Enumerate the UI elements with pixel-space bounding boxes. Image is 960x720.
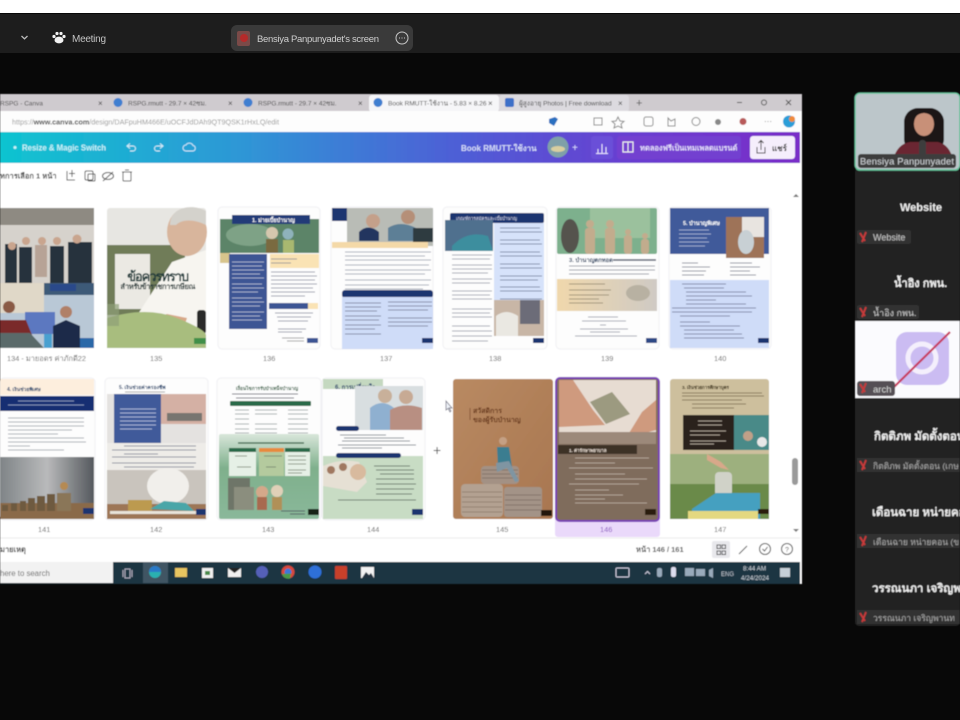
screen share pill: Bensiya Panpunyadet's screen [257, 34, 379, 45]
canva gradient toolbar: Resize & Magic Switch [22, 144, 106, 152]
windows taskbar: ENG [721, 572, 734, 578]
browser tab strip: RSPG.rmutt - 29.7 × 42ซม. [258, 100, 337, 108]
thumbnail 146 selected: 146 [600, 525, 612, 534]
tile: duanchai: เดือนฉาย หน่ายคอน (ข [873, 537, 959, 547]
thumbnail 138 [443, 207, 547, 363]
thumbnail 145: ของผู้รับบำนาญ [473, 415, 521, 425]
thumbnail 137 [331, 207, 433, 363]
thumbnail 142: 5. เงินช่วยค่าครองชีพ [119, 384, 166, 391]
windows taskbar: here to search [0, 569, 50, 578]
thumbnail 136 [218, 207, 320, 363]
windows taskbar [0, 562, 800, 584]
active speaker tile [855, 93, 960, 170]
chevron icon [22, 36, 28, 39]
canva gradient toolbar: + [572, 143, 578, 154]
thumbnail 140 [669, 207, 771, 363]
windows taskbar: 4/24/2024 [741, 575, 770, 582]
thumbnail 142 [105, 378, 208, 534]
screen share pill [231, 25, 413, 51]
status footer: หน้า 146 / 161 [636, 545, 684, 554]
address bar [0, 111, 802, 132]
tile: arch: arch [873, 384, 891, 396]
thumbnail 146 selected: 1. ค่ารักษาพยาบาล [569, 448, 607, 453]
browser window [0, 94, 802, 584]
thumbnail 140: 140 [714, 354, 726, 363]
tile: duanchai [857, 506, 960, 548]
tile: wannapa: วรรณนภา เจริญพานท [873, 613, 955, 623]
meeting top bar [0, 14, 960, 53]
thumbnail title: ข้อควรทราบ [127, 269, 189, 284]
thumbnail 135: 135 [150, 354, 162, 363]
cursor [446, 401, 452, 412]
thumbnail 137: 137 [380, 354, 392, 363]
thumbnail grid [0, 207, 771, 537]
thumbnail 141: 4. เงินช่วยพิเศษ [7, 386, 41, 393]
thumbnail 139: 3. บำนาญตกทอด [569, 256, 613, 264]
thumbnail 136: 1. ม่ายเบี้ยบำนาญ [252, 215, 295, 224]
thumbnail 143: 143 [262, 525, 274, 534]
canva gradient toolbar: Book RMUTT-ใช้งาน [461, 143, 537, 153]
address bar: ··· [764, 117, 772, 126]
thumbnail 139: 139 [601, 354, 613, 363]
thumbnail 138: เกณฑ์การสมัครและเบี้ยบำนาญ [456, 215, 517, 221]
meeting label: Meeting [72, 34, 106, 45]
thumbnail 141 [0, 378, 95, 534]
thumbnail 135: สำหรับข้าราชการเกษียณ [120, 282, 195, 291]
thumbnail 143: เงื่อนไขการรับบำเหน็จบำนาญ [236, 384, 298, 392]
status footer: ? [785, 547, 789, 554]
canva gradient toolbar: ทดลองฟรีเป็นเทมเพลตแบรนด์ [640, 142, 738, 152]
thumbnail 143 [217, 378, 321, 534]
tile: website [857, 202, 942, 244]
windows taskbar: 8:44 AM [743, 566, 766, 572]
thumbnail 144 [322, 378, 425, 534]
thumbnail 138: 138 [489, 354, 501, 363]
browser tab strip: × [228, 99, 233, 108]
status footer [0, 538, 800, 558]
tile: website: Website [873, 232, 905, 242]
page actions toolbar [0, 163, 800, 190]
thumbnail 145: 145 [496, 525, 508, 534]
add page plus icon: + [433, 442, 441, 458]
browser tab strip: RSPG.rmutt - 29.7 × 42ซม. [128, 100, 207, 108]
thumbnail 135 [107, 207, 207, 363]
thumbnail 142: 142 [150, 525, 162, 534]
tile: arch [855, 321, 960, 398]
browser tab strip: RSPG - Canva [0, 100, 43, 108]
thumbnail 134 [0, 208, 94, 363]
browser tab strip: ผู้สูงอายุ Photos | Free download [519, 100, 612, 108]
tile: nam-ing: น้ำอิง กพน. [894, 275, 947, 290]
tile: nam-ing [857, 275, 947, 319]
page actions toolbar: ทการเลือก 1 หน้า [0, 172, 57, 180]
participant panel [855, 93, 960, 626]
content scrollbar [792, 194, 799, 532]
thumbnail 134: 134 - มายอดร ค่าภักดี22 [7, 354, 86, 363]
top white strip [0, 0, 960, 13]
status footer: มายเหตุ [0, 545, 26, 554]
canva gradient toolbar [0, 132, 800, 163]
thumbnail 147: 147 [714, 525, 726, 534]
thumbnail 144: 6. การเปลี่ยนใจ [335, 382, 376, 391]
panel: dark tile background [855, 168, 960, 626]
thumbnail 139 [556, 207, 659, 363]
browser tab strip: + [636, 98, 642, 110]
address bar: https://www.canva.com/design/DAFpuHM466E/uOCFJdDAh9QT9QSK1rHxLQ/edit [12, 118, 279, 126]
browser tab strip: × [98, 99, 103, 108]
thumbnail 144: 144 [367, 525, 379, 534]
thumbnail 146 selected [555, 378, 660, 537]
thumbnail 140: 5. บำนาญพิเศษ [683, 220, 720, 227]
tile: nam-ing: น้ำอิง กพน. [873, 306, 917, 318]
tile: website: Website [900, 202, 942, 214]
thumbnail 145 [453, 379, 553, 534]
tile: kittiphop [857, 427, 960, 472]
browser tab strip: × [618, 99, 623, 108]
browser tab strip [0, 94, 802, 112]
thumbnail 141: 141 [38, 525, 50, 534]
thumbnail 136: 136 [263, 354, 275, 363]
active speaker tile: Bensiya Panpunyadet [860, 156, 954, 166]
thumbnail 147 [670, 379, 769, 534]
tile: kittiphop: กิตติภพ มัดตั้งตอน (เกษ [873, 460, 959, 471]
tile: wannapa [857, 582, 960, 624]
canva gradient toolbar: แชร์ [772, 143, 788, 153]
browser tab strip: Book RMUTT-ใช้งาน - 5.83 × 8.26 [388, 100, 487, 108]
icon: paw [52, 32, 66, 43]
thumbnail 147: 3. เงินช่วยการศึกษาบุตร [682, 384, 730, 391]
browser tab strip: × [358, 99, 363, 108]
browser tab strip: × [488, 99, 493, 108]
thumbnail 145: สวัสดิการ [473, 407, 502, 415]
